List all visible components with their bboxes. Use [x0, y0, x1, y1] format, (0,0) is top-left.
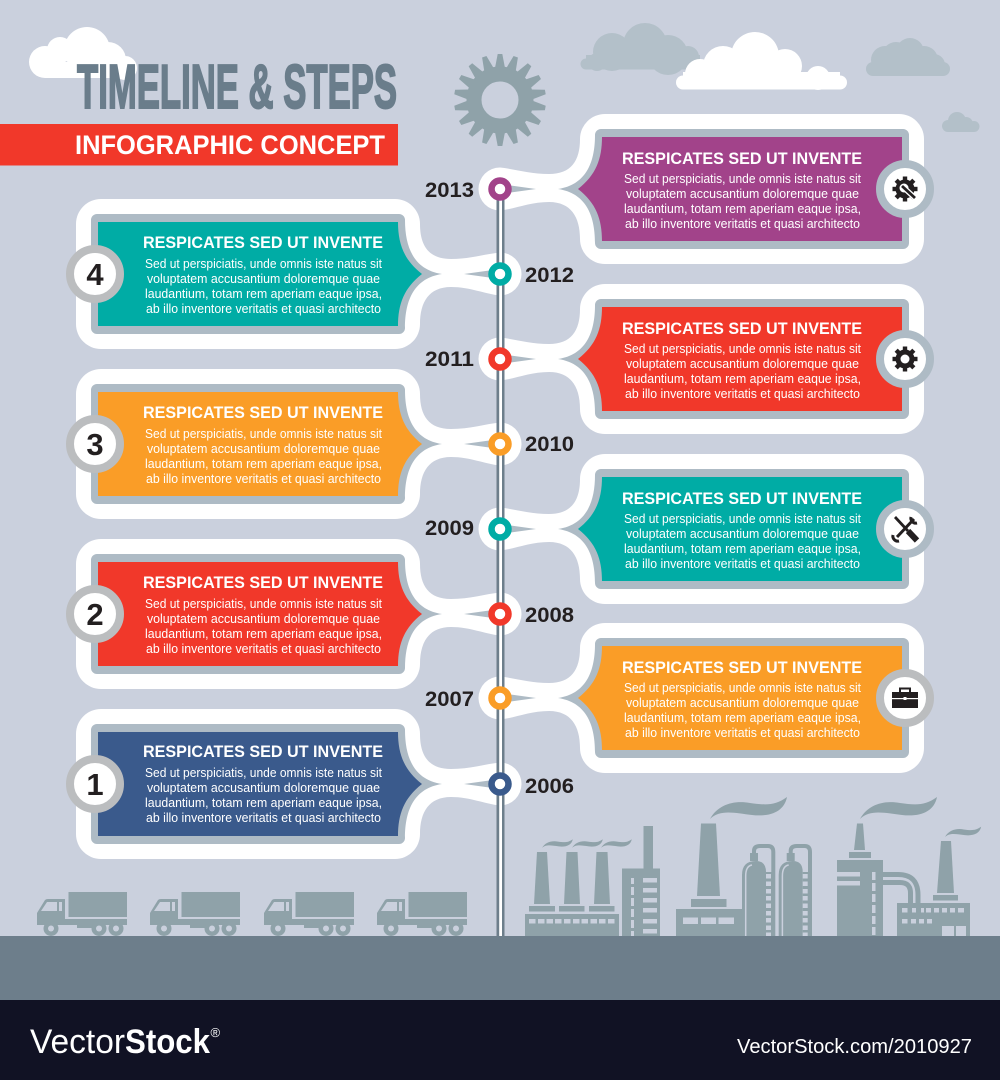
text: 2011	[622, 319, 862, 401]
cloud: grey right	[866, 38, 950, 76]
icon: gear	[880, 334, 930, 384]
banner	[0, 124, 398, 166]
footer bar: ®	[210, 1025, 220, 1040]
text: 2009: laudantium, totam rem aperiam eaque ipsa,	[624, 542, 861, 556]
text: 2013: ab illo inventore veritatis et quasi architecto	[625, 217, 860, 231]
badge: step 1: 1	[86, 767, 104, 802]
cloud: white top left	[29, 27, 137, 80]
text: 2007: Sed ut perspiciatis, unde omnis iste natus sit	[624, 681, 862, 695]
icon: large gear	[454, 54, 546, 146]
text: 2009: voluptatem accusantium doloremque quae	[626, 527, 859, 541]
text: 2011: Sed ut perspiciatis, unde omnis iste natus sit	[624, 342, 862, 356]
text: 2008: ab illo inventore veritatis et quasi architecto	[146, 642, 381, 656]
text: 2013: RESPICATES SED UT INVENTE	[622, 149, 862, 168]
card 2011 red	[478, 284, 924, 434]
text: 2013: Sed ut perspiciatis, unde omnis iste natus sit	[624, 172, 862, 186]
year 2010: 2010	[525, 433, 574, 456]
text: 2008	[143, 573, 383, 656]
text: 2010: Sed ut perspiciatis, unde omnis iste natus sit	[145, 427, 383, 441]
node 2012	[492, 266, 508, 282]
node 2013	[492, 180, 508, 198]
badge: step 2: 2	[86, 597, 104, 632]
badge: step 3	[70, 419, 120, 469]
text: 2010: voluptatem accusantium doloremque quae	[147, 442, 380, 456]
card 2007 orange	[478, 623, 924, 773]
text: 2010: RESPICATES SED UT INVENTE	[143, 403, 383, 422]
text: 2007: voluptatem accusantium doloremque quae	[626, 696, 859, 710]
year 2009: 2009	[425, 517, 474, 540]
card 2010 orange	[76, 369, 522, 519]
node 2010	[492, 436, 508, 452]
card 2008 red	[76, 539, 522, 689]
text: 2010: ab illo inventore veritatis et quasi architecto	[146, 472, 381, 486]
text: 2011: voluptatem accusantium doloremque quae	[626, 357, 859, 371]
footer bar: Stock	[125, 1023, 211, 1061]
text: 2009: ab illo inventore veritatis et quasi architecto	[625, 557, 860, 571]
text: 2013	[622, 149, 862, 231]
text: 2008: Sed ut perspiciatis, unde omnis iste natus sit	[145, 597, 383, 611]
factory: chimney with tanks	[676, 797, 812, 936]
text: 2012: laudantium, totam rem aperiam eaque ipsa,	[145, 287, 382, 301]
year 2013: 2013	[425, 179, 474, 202]
text: 2006: Sed ut perspiciatis, unde omnis iste natus sit	[145, 766, 383, 780]
text: 2007: RESPICATES SED UT INVENTE	[622, 658, 862, 677]
text: 2007: ab illo inventore veritatis et quasi architecto	[625, 726, 860, 740]
text: 2012: ab illo inventore veritatis et quasi architecto	[146, 302, 381, 316]
badge: step 3: 3	[86, 427, 104, 462]
icon: crossed tools	[880, 504, 930, 554]
footer bar	[0, 1000, 1000, 1080]
text: 2006	[143, 742, 383, 825]
card 2009 teal	[478, 454, 924, 604]
card 2012 teal	[76, 199, 522, 349]
badge: step 4: 4	[86, 257, 104, 292]
node 2007	[492, 690, 508, 706]
node 2011	[492, 350, 508, 368]
text: 2013: voluptatem accusantium doloremque quae	[626, 187, 859, 201]
text: 2012: voluptatem accusantium doloremque quae	[147, 272, 380, 286]
text: 2011: ab illo inventore veritatis et quasi architecto	[625, 387, 860, 401]
text: 2007	[622, 658, 862, 740]
badge: step 4	[70, 249, 120, 299]
text: 2008: RESPICATES SED UT INVENTE	[143, 573, 383, 592]
text: 2007: laudantium, totam rem aperiam eaque ipsa,	[624, 711, 861, 725]
text: 2012	[143, 233, 383, 316]
text: 2010: laudantium, totam rem aperiam eaque ipsa,	[145, 457, 382, 471]
badge: step 2	[70, 589, 120, 639]
text: 2010	[143, 403, 383, 486]
year 2012: 2012	[525, 264, 574, 287]
year 2007: 2007	[425, 688, 474, 711]
footer bar: Vector	[30, 1023, 125, 1061]
year 2011: 2011	[425, 348, 474, 371]
trucks	[37, 892, 467, 936]
badge: step 1	[70, 759, 120, 809]
card 2006 navy	[76, 709, 522, 859]
text: 2006: ab illo inventore veritatis et quasi architecto	[146, 811, 381, 825]
node 2008	[492, 606, 508, 622]
node 2006	[492, 776, 508, 792]
text: 2011: laudantium, totam rem aperiam eaque ipsa,	[624, 372, 861, 386]
text: 2012: RESPICATES SED UT INVENTE	[143, 233, 383, 252]
icon: gear with wrench	[880, 164, 930, 214]
text: 2009	[622, 489, 862, 571]
factory: three chimneys with tower	[525, 826, 660, 936]
text: 2006: laudantium, totam rem aperiam eaque ipsa,	[145, 796, 382, 810]
text: 2008: laudantium, totam rem aperiam eaque ipsa,	[145, 627, 382, 641]
cloud: small grey	[942, 112, 980, 132]
year 2006: 2006	[525, 775, 574, 798]
node 2009	[492, 520, 508, 538]
text: 2013: laudantium, totam rem aperiam eaque ipsa,	[624, 202, 861, 216]
cloud: white top right	[676, 32, 847, 90]
text: 2011: RESPICATES SED UT INVENTE	[622, 319, 862, 338]
text: 2008: voluptatem accusantium doloremque quae	[147, 612, 380, 626]
text: 2012: Sed ut perspiciatis, unde omnis iste natus sit	[145, 257, 383, 271]
text: 2006: RESPICATES SED UT INVENTE	[143, 742, 383, 761]
ground	[0, 936, 1000, 1000]
banner: INFOGRAPHIC CONCEPT	[75, 130, 385, 160]
year 2008: 2008	[525, 604, 574, 627]
cloud: grey top centre	[580, 23, 700, 75]
title: TIMELINE & STEPS	[77, 53, 397, 122]
factory: tower with pipe and low building	[837, 797, 981, 936]
timeline axis	[496, 189, 504, 936]
footer bar: VectorStock.com/2010927	[737, 1036, 972, 1058]
text: 2009: RESPICATES SED UT INVENTE	[622, 489, 862, 508]
icon: briefcase	[880, 673, 930, 723]
text: 2009: Sed ut perspiciatis, unde omnis iste natus sit	[624, 512, 862, 526]
text: 2006: voluptatem accusantium doloremque quae	[147, 781, 380, 795]
card 2013 purple	[478, 114, 924, 264]
